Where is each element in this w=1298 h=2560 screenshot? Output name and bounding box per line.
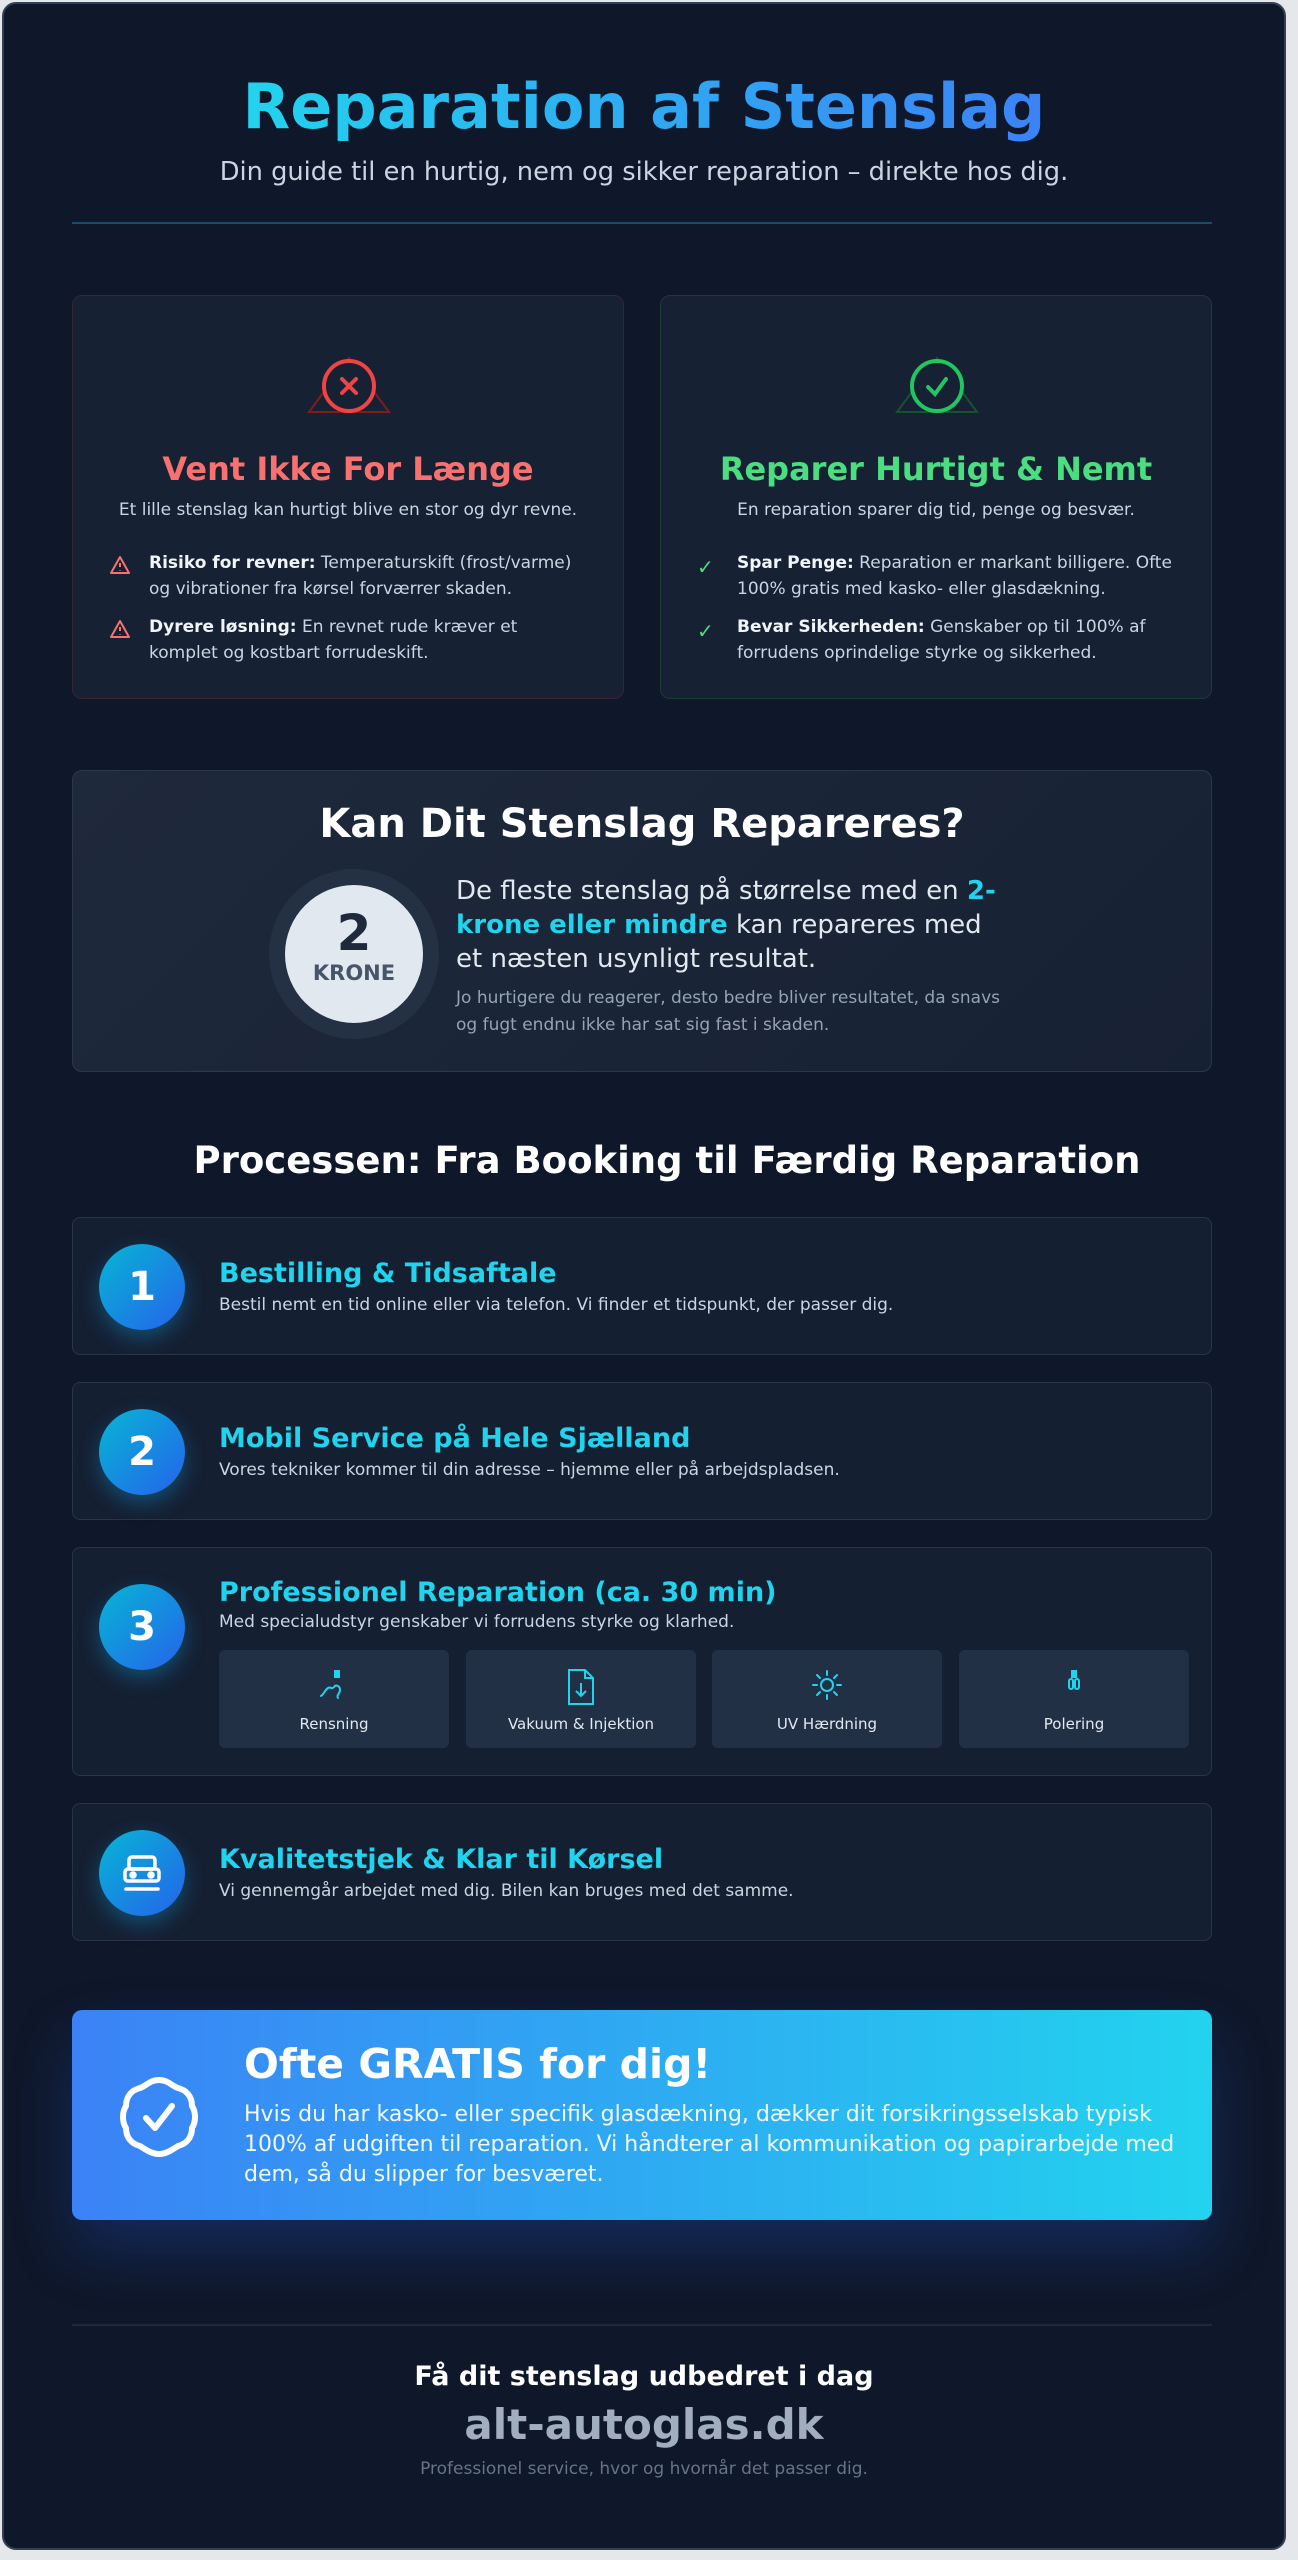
footer cta: Få dit stenslag udbedret i dag [414, 2361, 874, 2392]
note: Jo hurtigere du reagerer, desto bedre bliver resultatet, da snavs og fugt endnu ikke har sat sig fast i skaden. [456, 988, 1000, 1035]
title: Professionel Reparation (ca. 30 min) [219, 1577, 777, 1608]
tile: vakuum [466, 1650, 696, 1748]
tagline: Professionel service, hvor og hvornår det passer dig. [420, 2459, 868, 2479]
callout: gratis [72, 2010, 1212, 2220]
bullets: komplet og kostbart forrudeskift. [149, 643, 429, 663]
desc: Med specialudstyr genskaber vi forrudens styrke og klarhed. [219, 1612, 734, 1632]
footer [414, 2361, 874, 2479]
panel: can it be repaired [72, 770, 1212, 1072]
url: alt-autoglas.dk [464, 2400, 824, 2449]
bullets [697, 553, 1172, 663]
bullets: Bevar Sikkerheden: Genskaber op til 100% af [737, 617, 1146, 637]
title: Kvalitetstjek & Klar til Kørsel [219, 1844, 663, 1875]
title: Mobil Service på Hele Sjælland [219, 1423, 690, 1454]
icon: warning x [307, 356, 391, 413]
badge 2 [99, 1409, 185, 1495]
step 1 [72, 1217, 1212, 1355]
step 2 [72, 1382, 1212, 1520]
tile: uv: UV Hærdning [777, 1715, 877, 1733]
bullets: 100% gratis med kasko- eller glasdækning. [737, 579, 1106, 599]
bullets: Dyrere løsning: En revnet rude kræver et [149, 617, 517, 637]
icon: badge check [120, 2077, 198, 2157]
heading: Kan Dit Stenslag Repareres? [319, 801, 965, 847]
bullets: ✓ [697, 555, 714, 579]
badge 1: 1 [128, 1264, 156, 1310]
badge 1 [99, 1244, 185, 1330]
tile: rensning [219, 1650, 449, 1748]
bullets: og vibrationer fra kørsel forværrer skaden. [149, 579, 512, 599]
title: Bestilling & Tidsaftale [219, 1258, 557, 1289]
bullets: Risiko for revner: Temperaturskift (frost/varme) [149, 553, 571, 573]
heading: Ofte GRATIS for dig! [244, 2040, 711, 2088]
icon: coin: 2 [337, 904, 371, 962]
tile: polering: Polering [1044, 1715, 1104, 1733]
text: En reparation sparer dig tid, penge og besvær. [737, 500, 1135, 520]
desc: Bestil nemt en tid online eller via telefon. Vi finder et tidspunkt, der passer dig. [219, 1295, 893, 1315]
badge 3 [99, 1584, 185, 1670]
bullets [110, 553, 571, 663]
tile: rensning: Rensning [299, 1715, 368, 1733]
tile: vakuum: Vakuum & Injektion [508, 1715, 654, 1733]
bullets: Spar Penge: Reparation er markant billigere. Ofte [737, 553, 1172, 573]
tile: polering [959, 1650, 1189, 1748]
title: Reparation af Stenslag [243, 70, 1045, 143]
icon: coin [269, 869, 439, 1039]
step 3 [72, 1547, 1212, 1776]
process heading: Processen: Fra Booking til Færdig Reparation [194, 1139, 1140, 1182]
panel: fix [660, 295, 1212, 699]
text: De fleste stenslag på størrelse med en 2-krone eller mindre kan repareres med et næsten usynligt resultat. [456, 876, 996, 974]
badge 2: 2 [128, 1429, 156, 1475]
bullets: ✓ [697, 619, 714, 643]
text: Hvis du har kasko- eller specifik glasdækning, dækker dit forsikringsselskab typisk 100% af udgiften til reparation. Vi håndterer al kommunikation og papirarbejde med dem, så du slipper for besværet. [244, 2102, 1174, 2187]
desc: Vores tekniker kommer til din adresse – hjemme eller på arbejdspladsen. [219, 1460, 840, 1480]
heading: Vent Ikke For Længe [162, 450, 534, 488]
bullets: forrudens oprindelige styrke og sikkerhed. [737, 643, 1097, 663]
badge 3: 3 [128, 1604, 156, 1650]
subtitle: Din guide til en hurtig, nem og sikker reparation – direkte hos dig. [220, 157, 1068, 187]
icon: check [895, 356, 979, 413]
badge: car [99, 1830, 185, 1916]
text: Et lille stenslag kan hurtigt blive en stor og dyr revne. [119, 500, 577, 520]
panel: wait [72, 295, 624, 699]
tile: uv [712, 1650, 942, 1748]
icon: coin: KRONE [313, 961, 395, 985]
step 4 [72, 1803, 1212, 1941]
heading: Reparer Hurtigt & Nemt [720, 450, 1152, 488]
desc: Vi gennemgår arbejdet med dig. Bilen kan bruges med det samme. [219, 1881, 794, 1901]
